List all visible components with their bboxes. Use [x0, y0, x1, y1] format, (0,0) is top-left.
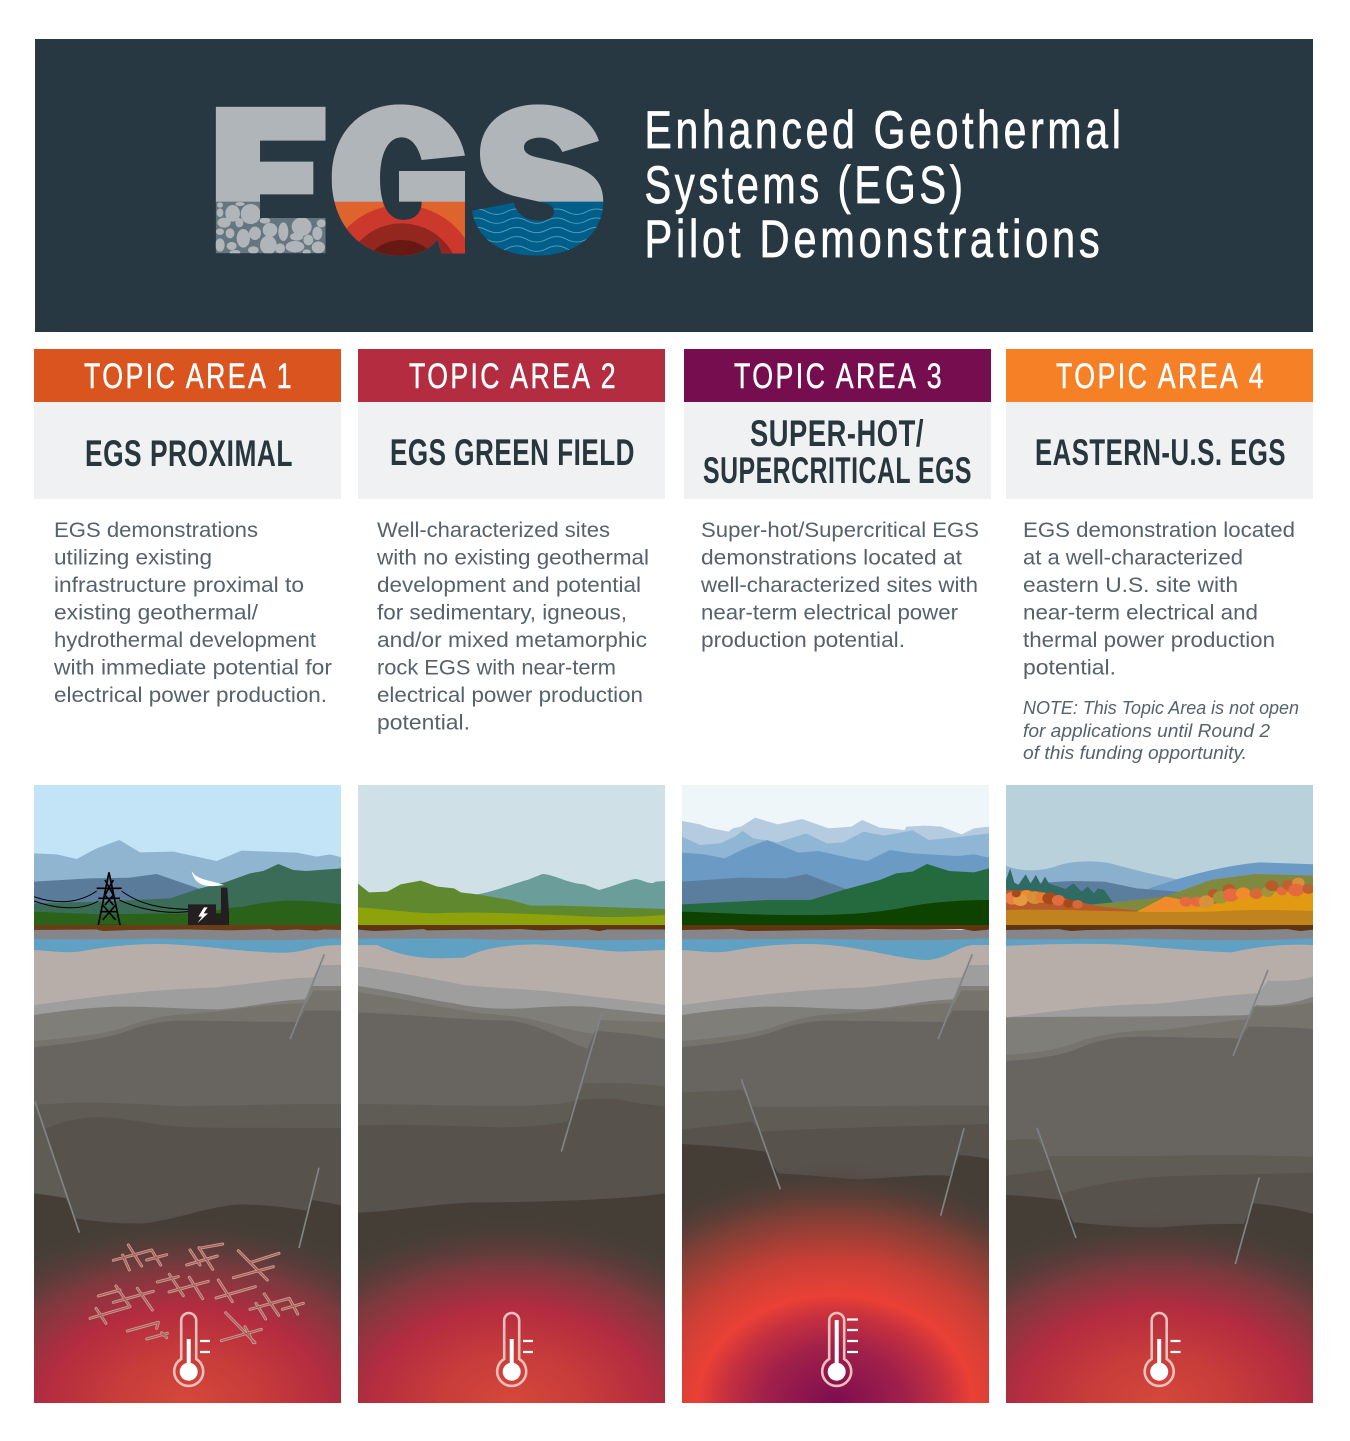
panel 3: cross-section super-hot [682, 785, 989, 1403]
panel 1: cross-section with power plant [34, 785, 341, 1403]
description: topic area 3: near-term electrical power [701, 600, 958, 624]
smoke plume [192, 871, 224, 886]
description: topic area 4 [1023, 518, 1295, 680]
surface landscape with autumn forest [1004, 785, 1315, 942]
main title: Enhanced Geothermal [644, 101, 1124, 160]
fault line [561, 1012, 602, 1152]
column 1: topic area 1 heading: EGS PROXIMAL [85, 433, 293, 474]
header banner [35, 39, 1313, 358]
description: topic area 3 [700, 518, 979, 652]
column 3: topic area 3 heading: TOPIC AREA 3 [734, 357, 944, 396]
description: topic area 3: demonstrations located at [701, 546, 962, 570]
description: topic area 1: hydrothermal development [54, 628, 316, 652]
ground line [1006, 925, 1314, 931]
description: topic area 4: near-term electrical and [1023, 600, 1258, 624]
evergreen trees [1006, 868, 1114, 904]
description: topic area 1: existing geothermal/ [54, 600, 258, 624]
panel 4: cross-section eastern U.S. [1006, 785, 1313, 1403]
description: topic area 4: EGS demonstration located [1023, 518, 1295, 542]
ground line [682, 925, 989, 931]
description: topic area 1 [53, 518, 332, 707]
description: topic area 2: for sedimentary, igneous, [377, 600, 627, 624]
description: topic area 2: and/or mixed metamorphic [377, 628, 647, 652]
note: topic area 4 availability: NOTE: This Topic Area is not open [1023, 698, 1299, 718]
fault lines [741, 954, 972, 1216]
note: topic area 4 availability: of this funding opportunity. [1023, 743, 1247, 763]
column 2: topic area 2 heading: TOPIC AREA 2 [409, 357, 618, 396]
description: topic area 4: potential. [1023, 656, 1116, 680]
subsurface rock strata [1006, 938, 1313, 1403]
description: topic area 2: potential. [377, 710, 470, 734]
transmission tower and wires [34, 872, 188, 926]
ground line [358, 925, 665, 931]
description: topic area 4: eastern U.S. site with [1023, 573, 1238, 597]
description: topic area 2: with no existing geothermal [376, 546, 649, 570]
icon: thermometer [822, 1313, 858, 1386]
description: topic area 1: utilizing existing [54, 546, 212, 570]
description: topic area 1: with immediate potential for [53, 656, 332, 680]
power plant [188, 888, 229, 926]
icon: thermometer [497, 1313, 533, 1386]
heat zone [682, 1155, 989, 1403]
fault lines [1037, 970, 1268, 1264]
main title [644, 101, 1124, 269]
description: topic area 4: thermal power production [1023, 628, 1275, 652]
column 2: topic area 2 heading: EGS GREEN FIELD [390, 432, 635, 473]
description: topic area 1: infrastructure proximal to [54, 573, 304, 597]
ground line [34, 925, 341, 931]
autumn foliage [1004, 890, 1083, 909]
description: topic area 2: electrical power production [377, 683, 643, 707]
description: topic area 1: electrical power production. [54, 683, 327, 707]
description: topic area 2: rock EGS with near-term [377, 656, 616, 680]
column 1: topic area 1 heading [34, 349, 341, 499]
description: topic area 3: production potential. [701, 628, 905, 652]
column 4: topic area 4 heading: TOPIC AREA 4 [1056, 357, 1266, 396]
column 4: topic area 4 heading [1006, 349, 1313, 499]
heat zone [1006, 1205, 1313, 1403]
subsurface rock strata [358, 938, 665, 1403]
column 1: topic area 1 heading: TOPIC AREA 1 [84, 357, 294, 396]
icon: thermometer [174, 1313, 210, 1386]
logo letter S with water waves [467, 103, 607, 257]
surface landscape [358, 785, 665, 941]
icon: thermometer [1145, 1313, 1180, 1386]
note: topic area 4 availability: for applications until Round 2 [1023, 721, 1270, 741]
description: topic area 4: at a well-characterized [1023, 546, 1243, 570]
description: topic area 2: Well-characterized sites [377, 518, 610, 542]
subsurface rock strata [682, 938, 989, 1403]
heat zone [358, 1205, 665, 1403]
column 2: topic area 2 heading [358, 349, 665, 499]
heat zone [34, 1205, 341, 1403]
description: topic area 3: well-characterized sites with [700, 573, 978, 597]
EGS logo [216, 104, 604, 256]
description: topic area 2: development and potential [377, 573, 641, 597]
surface landscape [34, 785, 341, 958]
engineered fracture network [90, 1244, 303, 1343]
column 3: topic area 3 heading: SUPERCRITICAL EGS [703, 450, 972, 491]
logo letter G with magma bands [332, 104, 465, 256]
column 3: topic area 3 heading: SUPER-HOT/ [750, 413, 924, 454]
description: topic area 1: EGS demonstrations [54, 518, 258, 542]
description: topic area 2 [376, 518, 649, 734]
logo letter E with rock pattern [215, 107, 326, 255]
fault lines [35, 954, 324, 1248]
main title: Systems (EGS) [644, 156, 966, 215]
note: topic area 4 availability [1023, 698, 1299, 763]
main title: Pilot Demonstrations [644, 210, 1104, 269]
description: topic area 3: Super-hot/Supercritical EGS [701, 518, 979, 542]
subsurface rock strata [34, 944, 341, 1403]
surface landscape [682, 785, 989, 942]
column 3: topic area 3 heading [684, 349, 991, 499]
panel 2: cross-section green field [358, 785, 665, 1403]
